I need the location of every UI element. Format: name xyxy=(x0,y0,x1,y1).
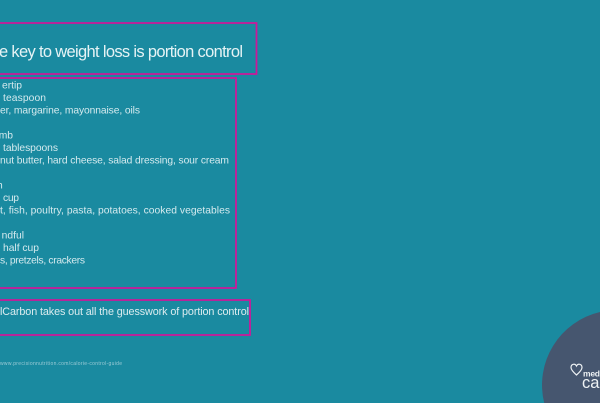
text: thumb portion: nut butter, hard cheese, salad dressing, sour cream xyxy=(0,156,229,166)
panel: portion guide xyxy=(0,78,236,288)
text: cup portion: cup xyxy=(3,193,19,204)
text: handful portion: ndful xyxy=(2,230,24,242)
panel: title box xyxy=(0,23,256,74)
text: cup portion: t, fish, poultry, pasta, potatoes, cooked vegetables xyxy=(0,206,230,216)
text: handful portion: half cup xyxy=(3,243,39,254)
logo text: ca xyxy=(582,374,600,392)
text: cup portion xyxy=(0,180,230,216)
logo text: med xyxy=(583,368,600,378)
icon: heart xyxy=(571,364,582,375)
text: fingertip portion xyxy=(0,80,140,116)
text: handful portion: s, pretzels, crackers xyxy=(0,256,85,266)
text: thumb portion xyxy=(0,130,229,166)
title: e key to weight loss is portion control xyxy=(0,43,243,61)
closing text: lCarbon takes out all the guesswork of portion control xyxy=(0,306,249,318)
text: fingertip portion: teaspoon xyxy=(3,93,46,104)
source citation: www.precisionnutrition.com/calorie-control-guide xyxy=(0,361,122,367)
text: thumb portion: tablespoons xyxy=(3,143,58,154)
text: handful portion xyxy=(0,230,85,266)
logo badge xyxy=(542,312,600,403)
text: fingertip portion: er, margarine, mayonnaise, oils xyxy=(0,106,140,116)
text: fingertip portion: ertip xyxy=(2,80,22,92)
panel: closing statement xyxy=(0,300,250,335)
